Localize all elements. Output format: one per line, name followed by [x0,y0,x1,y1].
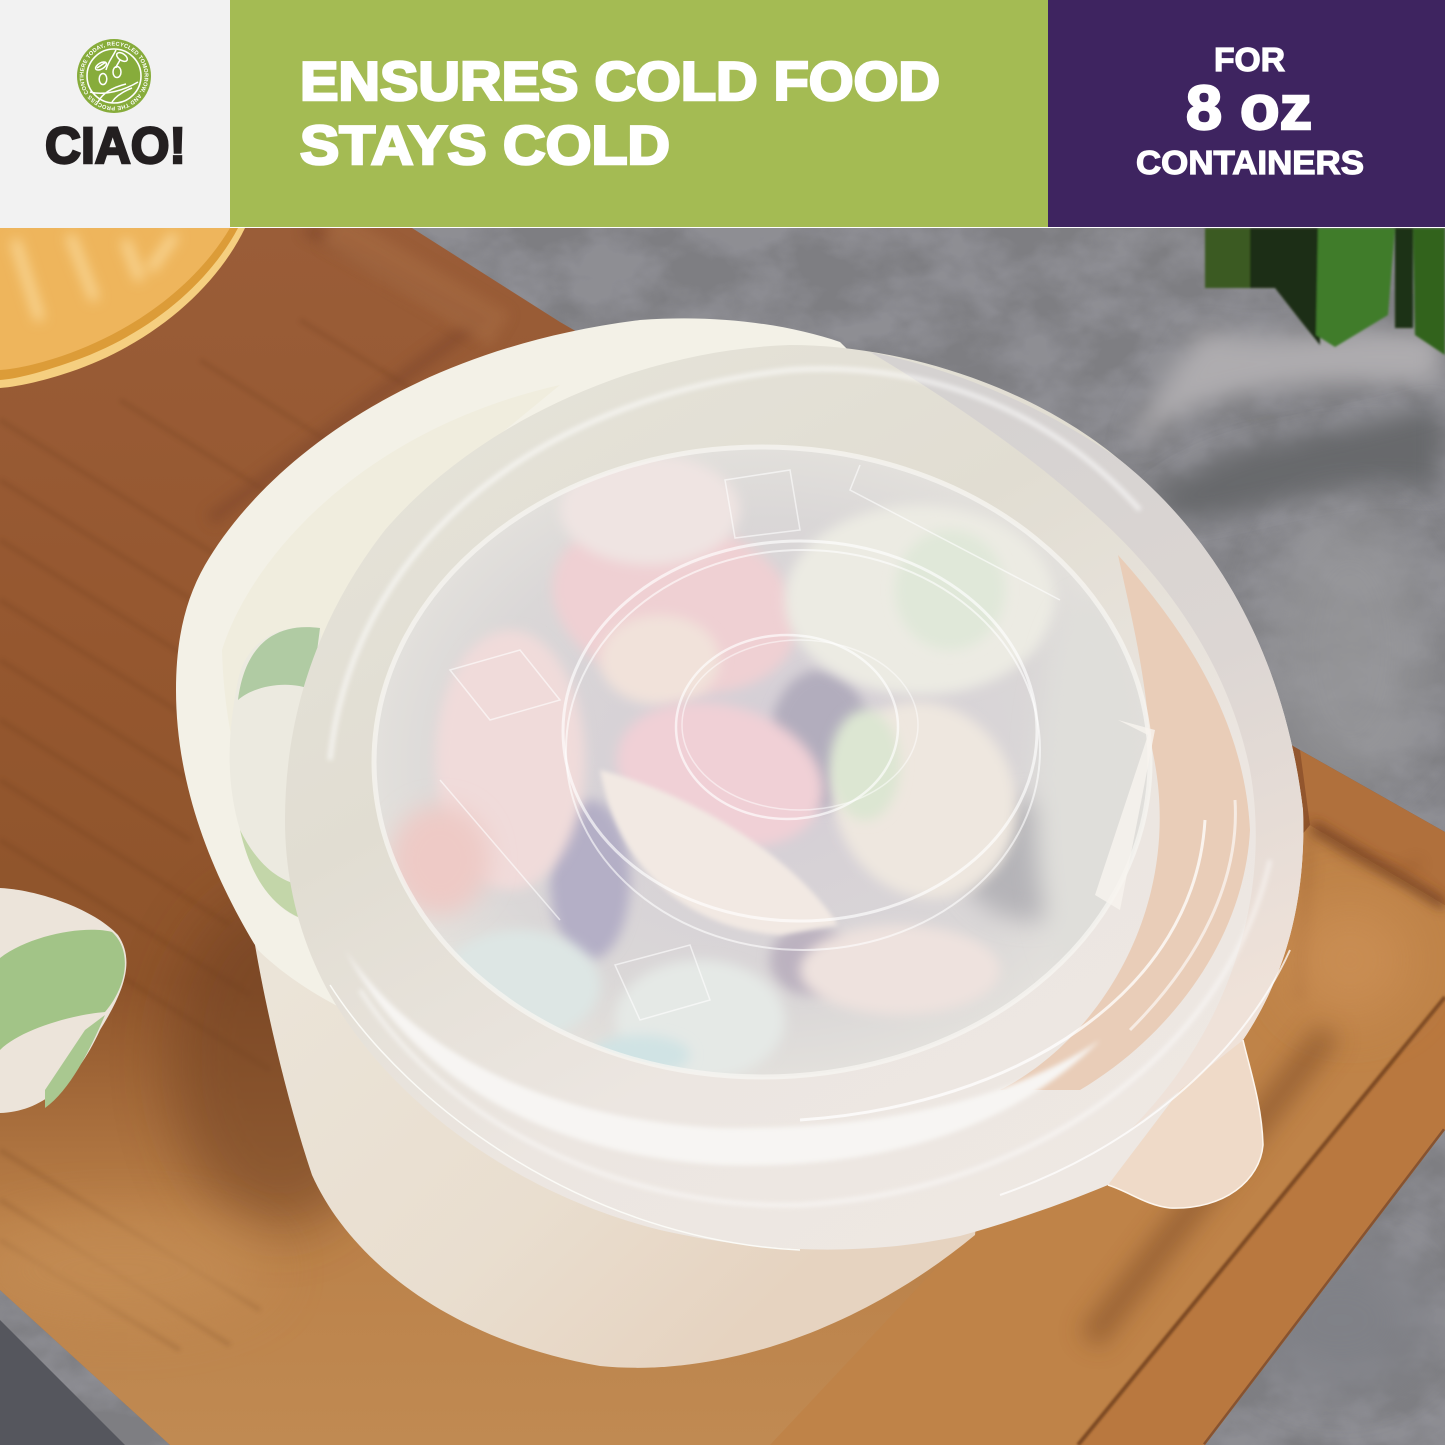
size text: FOR [1214,41,1285,78]
headline text: ENSURES COLD FOOD [300,50,940,112]
panel: container size [1048,0,1445,227]
size text: CONTAINERS [1136,144,1364,181]
panel: headline [230,0,1048,227]
header bar [0,0,1445,228]
green vegetable, top right [1205,228,1445,355]
bowl rim [176,318,846,1005]
marshmallow on board [0,888,126,1113]
icon: olive badge [77,39,151,113]
lid middle ring [563,541,1037,921]
size text [1136,41,1364,181]
board recess shading, top [210,228,480,520]
dark gaps [770,670,870,810]
bowl rim seen through lid [345,950,1100,1165]
size text: 8 oz [1186,74,1312,143]
bowl body [255,945,976,1368]
lid center ring [676,635,898,819]
lid inner disc with food [376,462,1052,1074]
marshmallows seen through lid [551,537,794,695]
board front edge, lower left [0,1290,170,1445]
wood grain [2,1150,258,1350]
plastic lid [285,345,1303,1250]
lid right tint [1000,555,1250,1090]
lid concentric rings [330,369,1290,1205]
lid disc outline [374,447,1150,1077]
lid tab notch [1095,720,1155,910]
green marshmallow in bowl [238,627,320,917]
headline text: STAYS COLD [300,114,670,176]
board rim, right side [1300,750,1445,905]
lid outer lip, top right [870,352,1303,1130]
lid outer body [285,345,1303,1250]
lower right wood tone [770,825,1445,1445]
lid embossed marks [440,465,1060,1020]
headline text [300,50,940,176]
panel: logo [0,0,230,228]
paper bowl [176,318,1000,1368]
lemon slice [0,228,245,388]
bowl inner wall [222,386,558,730]
logo wordmark: CIAO! [45,117,186,174]
